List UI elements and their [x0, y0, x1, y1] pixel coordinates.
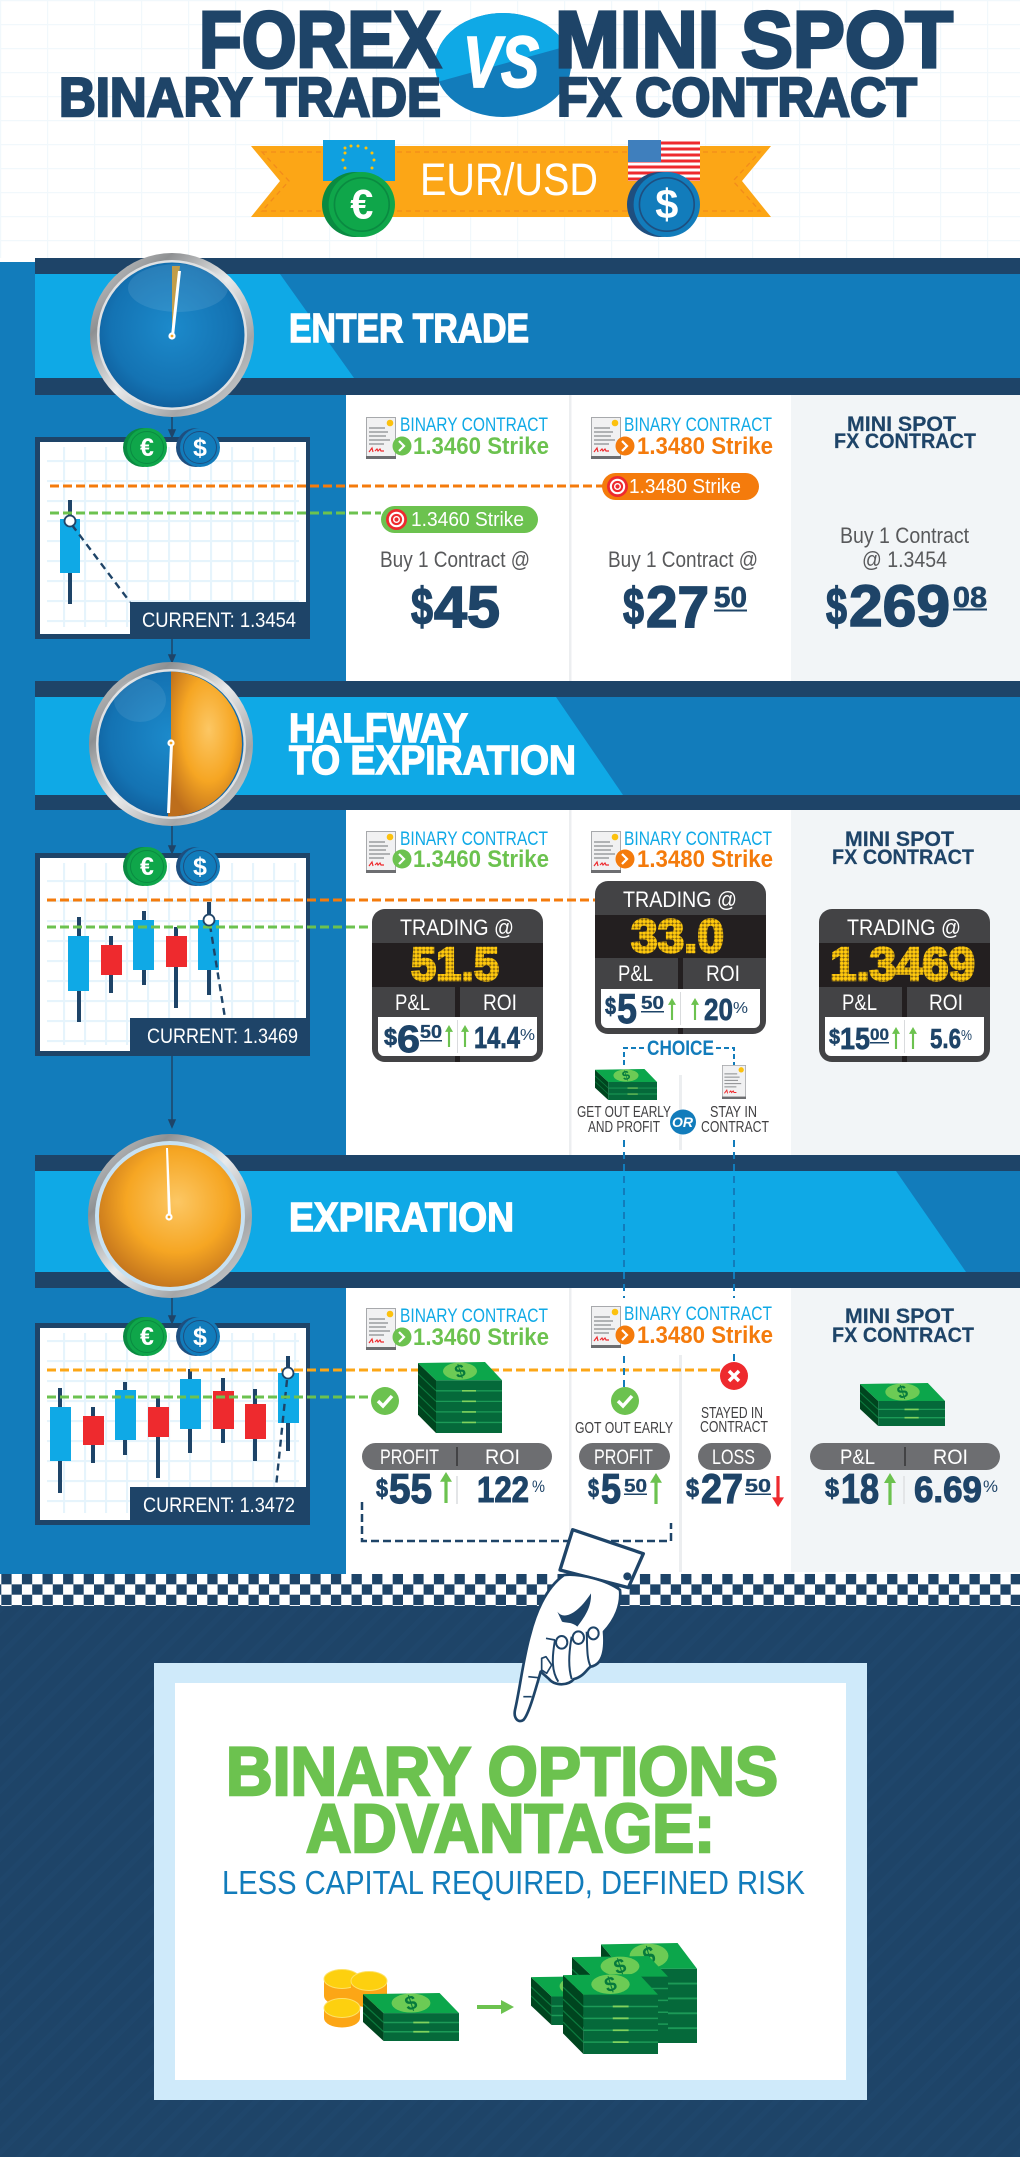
contract header: 1.3460 halfway: 1.3460 Strike — [413, 846, 549, 873]
label: stay in contract: CONTRACT — [701, 1119, 769, 1136]
icon: pointing hand — [515, 1530, 643, 1721]
contract header: 1.3480 enter trade: BINARY CONTRACT — [624, 415, 772, 436]
icon: large money stacks — [531, 1940, 697, 2054]
icon: coins and small money stack — [324, 1970, 459, 2041]
ribbon: eur/usd — [251, 140, 771, 237]
coins — [123, 1317, 220, 1356]
trading box: mini spot: ROI — [929, 990, 963, 1015]
choice paths down to expiration — [624, 1140, 734, 1388]
contract header: 1.3460 halfway — [366, 829, 549, 873]
heading: forex binary trade — [59, 0, 441, 128]
current price: CURRENT: 1.3472 — [143, 1494, 295, 1517]
trading box: 1.3460: P&L — [395, 990, 430, 1015]
contract header: 1.3480 expiration — [591, 1304, 773, 1349]
clock: start — [90, 253, 254, 417]
contract header: mini spot enter trade — [834, 413, 976, 453]
contract header: 1.3460 enter trade: 1.3460 Strike — [413, 433, 549, 460]
trading box: 1.3460: 6 — [397, 1019, 420, 1061]
contract header: mini spot enter trade: MINI SPOT — [847, 413, 956, 436]
result: mini spot $18, 6.69%: 18 — [841, 1465, 879, 1512]
icon: dollar coin — [627, 172, 700, 237]
current price — [130, 1018, 310, 1056]
trading box: 1.3480: 5 — [617, 985, 637, 1032]
heading: halfway to expiration: TO EXPIRATION — [289, 737, 576, 783]
pill: orange strike — [602, 473, 759, 500]
coins — [123, 847, 220, 886]
heading: halfway to expiration — [289, 705, 576, 783]
price: 1.3460 contract: 45 — [434, 575, 500, 640]
contract header: 1.3480 expiration: BINARY CONTRACT — [624, 1304, 772, 1325]
label: or: OR — [672, 1114, 694, 1130]
strike lines: expiration — [47, 1368, 721, 1397]
contract header: mini spot halfway: MINI SPOT — [845, 828, 954, 851]
heading — [226, 1733, 778, 1867]
label: got out early: GOT OUT EARLY — [575, 1420, 673, 1437]
connector arrows on left — [169, 417, 175, 1323]
label: or — [670, 1110, 696, 1134]
trading box: 1.3460: TRADING @ — [400, 915, 514, 940]
result: $27.50 loss — [686, 1443, 784, 1512]
contract header: 1.3460 expiration — [366, 1306, 549, 1351]
result: mini spot $18, 6.69%: 6.69 — [914, 1469, 982, 1510]
trading box: mini spot: TRADING @ — [847, 915, 961, 940]
contract header: 1.3460 expiration: 1.3460 Strike — [413, 1324, 549, 1351]
strike lines: enter trade — [50, 486, 603, 526]
trading box: mini spot: 5.6 — [930, 1023, 961, 1054]
contract header: 1.3480 halfway — [591, 829, 773, 873]
trading box: 1.3460: 50 — [420, 1022, 442, 1042]
icon: eu flag — [323, 140, 395, 181]
result: $5.50 profit: 50 — [624, 1476, 647, 1496]
heading: enter trade: ENTER TRADE — [289, 305, 529, 351]
current price: CURRENT: 1.3454 — [142, 609, 296, 632]
trading box: mini spot: $ — [829, 1026, 840, 1049]
candle — [60, 500, 80, 604]
result: mini spot $18, 6.69%: ROI — [933, 1446, 968, 1469]
price: 1.3480 contract: Buy 1 Contract @ — [608, 547, 758, 572]
band: expiration — [35, 1155, 1020, 1288]
left blue panel — [0, 262, 346, 1574]
contract header: 1.3460 expiration: BINARY CONTRACT — [400, 1306, 548, 1327]
icon: take profit money — [595, 1067, 657, 1100]
band: halfway to expiration — [35, 681, 1020, 810]
result: $27.50 loss: 27 — [701, 1465, 743, 1512]
contract header: 1.3480 enter trade: 1.3480 Strike — [637, 433, 773, 460]
trading box: 1.3460: 51.5 — [411, 938, 499, 990]
contract header: 1.3480 expiration: 1.3480 Strike — [637, 1322, 773, 1349]
price: mini spot: 269 — [849, 574, 950, 639]
contract header: 1.3460 enter trade: BINARY CONTRACT — [400, 415, 548, 436]
current price: CURRENT: 1.3469 — [147, 1025, 298, 1048]
trading box: mini spot: % — [961, 1027, 972, 1044]
heading: ADVANTAGE: — [306, 1790, 715, 1867]
heading: BINARY OPTIONS — [226, 1733, 778, 1810]
candles — [50, 1356, 299, 1493]
heading: mini spot fx contract: FX CONTRACT — [557, 66, 917, 128]
trading box: mini spot — [819, 909, 990, 1062]
trading box: 1.3460 — [372, 909, 543, 1062]
trading box: 1.3460: ROI — [483, 990, 517, 1015]
pill: orange strike: 1.3480 Strike — [629, 476, 741, 498]
result: $55 profit, 122% roi: 122 — [477, 1469, 529, 1510]
heading: halfway to expiration: HALFWAY — [289, 705, 468, 751]
price: 1.3480 contract: $ — [623, 578, 644, 636]
heading: forex binary trade: BINARY TRADE — [59, 66, 441, 128]
price: 1.3480 contract — [608, 547, 758, 640]
contract header: mini spot enter trade: FX CONTRACT — [834, 430, 976, 453]
trading box: 1.3480: 20 — [704, 992, 733, 1027]
bracket: profit options — [362, 1502, 671, 1541]
icon: green check — [371, 1387, 399, 1415]
price: 1.3460 contract: $ — [411, 578, 433, 636]
result: $27.50 loss: 50 — [745, 1476, 771, 1496]
contract header: 1.3480 halfway: 1.3480 Strike — [637, 846, 773, 873]
trading box: 1.3480: 50 — [641, 993, 664, 1013]
trading box: mini spot: 1.3469 — [830, 938, 975, 990]
label: get out early: GET OUT EARLY — [577, 1104, 671, 1121]
icon: profit money stack — [418, 1360, 502, 1433]
result: $27.50 loss: $ — [686, 1473, 699, 1503]
heading: mini spot fx contract — [555, 0, 953, 128]
trading box: mini spot: 15 — [840, 1021, 870, 1056]
price: 1.3480 contract: 27 — [646, 575, 709, 640]
price: 1.3460 contract — [380, 547, 530, 640]
trading box: mini spot: P&L — [842, 990, 877, 1015]
contract header: 1.3460 enter trade — [366, 415, 549, 460]
heading: expiration: EXPIRATION — [289, 1194, 514, 1240]
result: $5.50 profit: $ — [588, 1473, 599, 1503]
result: mini spot $18, 6.69% — [810, 1443, 1000, 1512]
chart: halfway — [35, 847, 310, 1056]
label: stayed in contract: CONTRACT — [700, 1419, 768, 1436]
ribbon label: EUR/USD — [420, 154, 598, 205]
checker band — [0, 1574, 1020, 1606]
label: get out early: AND PROFIT — [588, 1119, 660, 1136]
result: mini spot $18, 6.69%: % — [983, 1477, 998, 1496]
band: enter trade — [35, 258, 1020, 395]
result: $5.50 profit: PROFIT — [594, 1446, 653, 1469]
result: $55 profit, 122% roi — [362, 1443, 552, 1512]
contract header: mini spot expiration — [832, 1305, 974, 1347]
contract header: mini spot expiration: FX CONTRACT — [832, 1324, 974, 1347]
coins — [123, 428, 220, 467]
result: $55 profit, 122% roi: 55 — [389, 1465, 432, 1512]
contract header: 1.3460 halfway: BINARY CONTRACT — [400, 829, 548, 850]
trading box: 1.3460: $ — [384, 1024, 398, 1051]
label: stayed in contract — [700, 1405, 768, 1436]
contract header: 1.3480 enter trade — [591, 415, 773, 460]
trading box: 1.3480 — [595, 881, 766, 1034]
result: mini spot $18, 6.69%: P&L — [840, 1446, 875, 1469]
contract header: mini spot expiration: MINI SPOT — [845, 1305, 954, 1328]
result: mini spot $18, 6.69%: $ — [825, 1473, 840, 1503]
strike lines: halfway — [47, 900, 596, 927]
label: stay in contract — [701, 1104, 769, 1136]
chart: enter trade — [35, 428, 310, 639]
pill: green strike: 1.3460 Strike — [411, 509, 524, 531]
trading box: 1.3460: % — [520, 1027, 535, 1044]
arrow — [477, 2000, 514, 2014]
price: mini spot: 08 — [953, 582, 987, 614]
price: mini spot: Buy 1 Contract — [840, 523, 969, 548]
result: $55 profit, 122% roi: ROI — [485, 1446, 520, 1469]
label: stayed in contract: STAYED IN — [701, 1405, 763, 1422]
result: $55 profit, 122% roi: PROFIT — [380, 1446, 439, 1469]
vs badge — [435, 13, 571, 117]
price: mini spot: @ 1.3454 — [862, 547, 947, 572]
vs badge: VS — [463, 23, 539, 103]
trading box: 1.3480: P&L — [618, 961, 653, 986]
contract columns background — [346, 262, 1020, 1574]
icon: us flag — [628, 140, 700, 181]
price: 1.3480 contract: 50 — [714, 582, 747, 614]
price: mini spot: $ — [826, 578, 847, 636]
trading box: 1.3480: $ — [605, 993, 617, 1020]
choice: CHOICE — [647, 1037, 714, 1060]
header background — [0, 0, 1020, 262]
bottom background — [0, 1606, 1020, 2157]
trading box: mini spot: 00 — [870, 1025, 889, 1044]
price: 1.3460 contract: Buy 1 Contract @ — [380, 547, 530, 572]
choice — [624, 1037, 734, 1066]
result: $5.50 profit — [579, 1443, 670, 1512]
subheading: LESS CAPITAL REQUIRED, DEFINED RISK — [222, 1864, 805, 1901]
contract header: mini spot halfway: FX CONTRACT — [832, 846, 974, 869]
icon: mini spot money — [860, 1381, 945, 1426]
candles — [68, 902, 219, 1022]
result: $55 profit, 122% roi: % — [532, 1477, 545, 1496]
current price — [130, 1487, 310, 1525]
pill: green strike — [381, 506, 538, 533]
trading box: 1.3480: 33.0 — [631, 910, 724, 962]
panel: binary options advantage — [154, 1663, 867, 2100]
chart: expiration — [35, 1317, 310, 1525]
trading box: 1.3460: 14.4 — [474, 1020, 521, 1055]
icon: stay in contract document — [722, 1065, 746, 1099]
result: $5.50 profit: 5 — [601, 1465, 621, 1512]
trading box: 1.3480: TRADING @ — [623, 887, 737, 912]
trading box: 1.3480: % — [733, 1000, 748, 1017]
label: stay in contract: STAY IN — [710, 1104, 757, 1121]
clock: halfway — [89, 662, 253, 826]
contract header: mini spot halfway — [832, 828, 974, 869]
result: $55 profit, 122% roi: $ — [376, 1473, 388, 1503]
icon: red x — [720, 1362, 748, 1390]
label: get out early — [577, 1104, 671, 1136]
clock: expiration — [88, 1134, 252, 1298]
contract header: 1.3480 halfway: BINARY CONTRACT — [624, 829, 772, 850]
icon: green check early — [611, 1387, 639, 1415]
title — [61, 10, 954, 118]
icon: euro coin — [322, 172, 395, 237]
price: mini spot — [826, 523, 987, 639]
trading box: 1.3480: ROI — [706, 961, 740, 986]
current price — [130, 602, 310, 639]
result: $27.50 loss: LOSS — [712, 1446, 755, 1469]
